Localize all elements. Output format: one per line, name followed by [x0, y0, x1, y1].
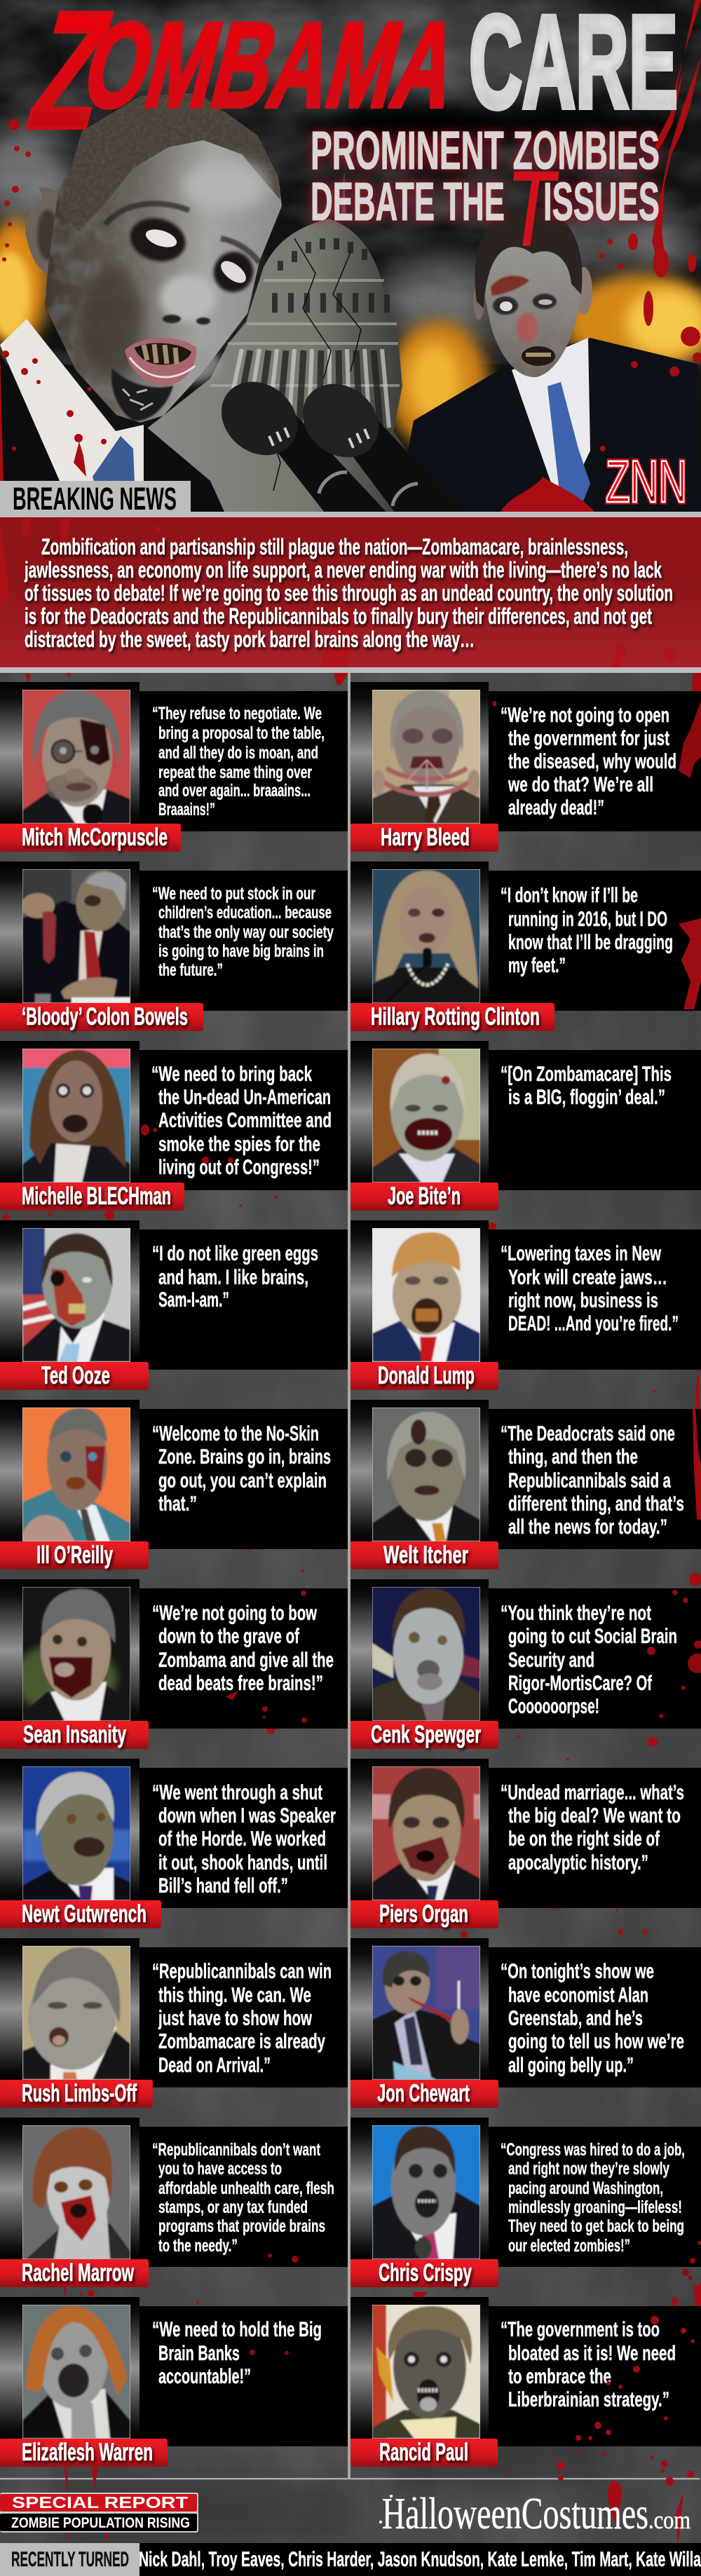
boehner zombie	[402, 206, 701, 512]
portrait	[372, 869, 480, 1003]
quote	[501, 1063, 672, 1109]
quote: “Welcome to the No-Skin	[152, 1422, 319, 1445]
quote: and ham. I like brains,	[158, 1266, 308, 1289]
name bar	[0, 1003, 203, 1031]
portrait	[22, 690, 130, 824]
breaking news tag	[0, 481, 191, 517]
name bar	[350, 1362, 498, 1390]
quote: that.”	[158, 1492, 197, 1515]
blood on quote	[141, 1124, 233, 1164]
quote: Sam-I-am.”	[158, 1288, 229, 1311]
recently turned ticker	[0, 2543, 701, 2576]
blood on quote	[682, 2241, 701, 2280]
quote: the Un-dead Un-American	[158, 1086, 331, 1109]
quote: already dead!”	[508, 796, 604, 819]
card row 10 right: Rancid Paul	[350, 2297, 701, 2467]
quote: is going to have big brains in	[158, 941, 324, 961]
name bar	[350, 1003, 554, 1031]
quote: “I do not like green eggs	[152, 1242, 318, 1265]
bottom rule	[0, 2478, 700, 2480]
background blood splatter	[2, 673, 701, 2548]
blood on quote	[226, 1590, 307, 1723]
quote: “We need to hold the Big	[152, 2318, 322, 2341]
quote: the future.”	[158, 960, 223, 980]
name bar: Rachel Marrow	[22, 2259, 134, 2287]
name bar: Michelle BLECHman	[22, 1183, 171, 1210]
name bar: Ill O’Reilly	[36, 1541, 113, 1569]
name bar: Newt Gutwrench	[22, 1900, 147, 1928]
page background	[0, 673, 701, 2576]
hair	[58, 93, 280, 231]
quote: affordable unhealth care, flesh	[158, 2179, 334, 2198]
name bar: Rancid Paul	[379, 2439, 468, 2466]
quote: “We went through a shut	[152, 1781, 322, 1804]
quote	[501, 704, 676, 819]
obama zombie	[0, 93, 282, 512]
quote: you to have access to	[158, 2159, 282, 2179]
card row 6 left: Sean Insanity	[0, 1579, 348, 1749]
card row 3 right: Joe Bite'n	[350, 1041, 701, 1211]
portrait	[372, 690, 480, 824]
card row 2 right: Hillary Rotting Clinton	[350, 861, 701, 1031]
name bar	[0, 1721, 149, 1749]
blood on quote	[268, 2254, 299, 2263]
card row 5 right: Welt Itcher	[350, 1400, 701, 1569]
quote	[501, 2318, 676, 2411]
quote	[152, 1602, 334, 1695]
special report tag	[0, 2493, 198, 2533]
name bar	[0, 2439, 168, 2467]
portrait	[372, 1766, 480, 1900]
name bar: Hillary Rotting Clinton	[371, 1003, 540, 1030]
quote: “We need to bring back	[151, 1063, 312, 1086]
quote: Braaains!”	[158, 800, 215, 819]
quote: dead beats free brains!”	[158, 1672, 323, 1695]
name bar: Jon Chewart	[377, 2080, 470, 2107]
quote: this thing. We can. We	[158, 1984, 311, 2007]
blood splatter	[0, 0, 701, 512]
blood on quote	[493, 701, 701, 778]
fire	[0, 219, 701, 450]
card row 7 right: Piers Organ	[350, 1759, 701, 1928]
portrait	[22, 1946, 130, 2080]
name bar	[0, 2080, 153, 2108]
intro blood stains	[0, 519, 675, 667]
quote: all going belly up.”	[508, 2054, 634, 2077]
quote	[501, 1602, 677, 1718]
quote	[152, 2318, 322, 2388]
quote: down to the grave of	[158, 1625, 300, 1648]
intro panel	[0, 512, 701, 673]
portrait	[372, 1587, 480, 1721]
card row 4 right: Donald Lump	[350, 1220, 701, 1390]
quote: down when I was Speaker	[158, 1804, 336, 1827]
quote: stamps, or any tax funded	[158, 2197, 308, 2217]
quote: Zombama and give all the	[158, 1649, 334, 1672]
quote: “We need to put stock in our	[152, 884, 315, 904]
smoke	[0, 0, 701, 364]
card row 2 left: Colon Bowels	[0, 861, 348, 1031]
suit and collar	[0, 354, 210, 512]
quote: Security and	[508, 1649, 594, 1672]
quote: accountable!”	[158, 2365, 251, 2388]
quote	[152, 1781, 336, 1897]
nose	[160, 274, 216, 322]
portrait	[22, 1587, 130, 1721]
title	[15, 0, 678, 163]
quote: our elected zombies!”	[508, 2236, 630, 2256]
quote	[501, 1781, 684, 1874]
card row 1 right: Harry Bleed	[350, 682, 701, 852]
quote: Zone. Brains go in, brains	[158, 1445, 331, 1468]
quote: Activities Committee and	[158, 1109, 332, 1132]
special report tag: ZOMBIE POPULATION RISING	[11, 2515, 190, 2531]
quote: programs that provide brains	[158, 2216, 325, 2236]
portrait	[22, 1049, 130, 1183]
quote: Coooooorpse!	[508, 1695, 599, 1718]
name bar	[350, 2259, 498, 2287]
quote: “Republicannibals don’t want	[152, 2140, 320, 2160]
quote: Bill’s hand fell off.”	[158, 1874, 288, 1897]
name bar: Joe Bite’n	[388, 1183, 461, 1210]
card row 10 left: Elizaflesh Warren	[0, 2297, 348, 2467]
card row 5 left: Ill O'Reilly	[0, 1400, 348, 1569]
name bar: Cenk Spewger	[371, 1721, 481, 1748]
quote: of the Horde. We worked	[158, 1827, 326, 1851]
quote: and over again... braaains...	[158, 781, 311, 800]
intro text: distracted by the sweet, tasty pork barrel brains along the way…	[25, 627, 475, 652]
quote: to embrace the	[508, 2365, 611, 2388]
microphones	[207, 367, 470, 519]
card row 8 left: Rush Limbs-Off	[0, 1938, 348, 2108]
quote: and all they do is moan, and	[158, 743, 318, 763]
eyes	[125, 212, 190, 267]
quote: living out of Congress!”	[158, 1156, 320, 1179]
portrait	[369, 2122, 484, 2263]
quote	[501, 1422, 684, 1539]
name bar: Elizaflesh Warren	[22, 2439, 153, 2466]
name bar: Donald Lump	[378, 1362, 475, 1389]
halloweencostumes logo: .com	[648, 2506, 690, 2534]
portrait	[372, 1049, 480, 1183]
portrait	[22, 1228, 130, 1362]
blood on quote	[250, 2350, 289, 2355]
card row 6 right: Cenk Spewger	[350, 1579, 701, 1749]
name bar	[0, 824, 181, 852]
quote	[152, 2140, 334, 2256]
quote	[152, 704, 325, 819]
name bar: ‘Bloody’ Colon Bowels	[22, 1003, 188, 1030]
name bar: Rush Limbs-Off	[22, 2080, 137, 2107]
name bar	[350, 2080, 498, 2108]
portrait	[22, 1408, 130, 1541]
special report tag: SPECIAL REPORT	[12, 2493, 188, 2512]
quote	[152, 1422, 331, 1515]
quote	[501, 1960, 684, 2077]
name bar	[350, 2439, 498, 2467]
subtitle: DEBATE THE	[311, 172, 505, 232]
breaking news tag: BREAKING NEWS	[13, 481, 177, 517]
portrait	[22, 2125, 130, 2259]
card row 9 left: Rachel Marrow	[0, 2118, 348, 2287]
quote	[151, 1063, 332, 1179]
portrait	[369, 2301, 484, 2442]
title word: Zombama: OMBAMA	[72, 0, 472, 132]
portrait	[22, 1766, 130, 1900]
quote	[152, 1242, 318, 1311]
quote	[501, 2140, 685, 2256]
mouth	[125, 338, 196, 386]
card row 3 left: Michelle BLECHman	[0, 1041, 348, 1211]
name bar: Piers Organ	[379, 1900, 468, 1928]
blood on quote	[647, 1590, 701, 1718]
name bar	[0, 1183, 184, 1211]
quote: my feet.”	[508, 954, 566, 977]
quote: “Republicannibals can win	[152, 1960, 332, 1983]
red T: T	[499, 150, 564, 268]
portrait	[19, 2301, 134, 2442]
ear	[25, 187, 76, 273]
name bar	[350, 1900, 498, 1928]
quote: Zombamacare is already	[158, 2030, 325, 2053]
rotted chin	[111, 368, 173, 421]
quote: Brain Banks	[158, 2342, 240, 2365]
quote: bring a proposal to the table,	[158, 723, 325, 743]
center divider	[348, 673, 350, 2479]
name bar	[0, 1362, 149, 1390]
card row 8 right: Jon Chewart	[350, 1938, 701, 2108]
portrait	[22, 869, 130, 1003]
name bar	[0, 2259, 149, 2287]
quote: smoke the spies for the	[158, 1133, 320, 1156]
quote: it out, shook hands, until	[158, 1851, 327, 1874]
name bar: Mitch McCorpuscle	[22, 824, 168, 851]
hero illustration	[0, 0, 701, 519]
subtitle	[311, 121, 660, 232]
intro text	[24, 534, 673, 652]
quote: thing, and then the	[508, 1445, 638, 1468]
name bar: Sean Insanity	[23, 1721, 126, 1748]
quote	[152, 1960, 332, 2077]
card row 7 left: Newt Gutwrench	[0, 1759, 348, 1928]
capitol	[147, 170, 449, 512]
quote: Dead on Arrival.”	[158, 2054, 271, 2077]
name bar	[0, 1900, 161, 1928]
portrait	[372, 1946, 480, 2080]
quote: that’s the only way our society	[158, 922, 334, 942]
blood on quote	[576, 2316, 695, 2441]
quote: “We’re not going to bow	[152, 1602, 317, 1625]
blood on quote	[679, 918, 701, 1009]
quote: children’s education... because	[158, 903, 332, 922]
quote: “They refuse to negotiate. We	[152, 704, 322, 723]
quote: go out, you can’t explain	[158, 1469, 327, 1492]
recently turned ticker: RECENTLY TURNED	[11, 2548, 129, 2571]
head	[45, 93, 282, 423]
quote	[501, 884, 673, 977]
name bar: Ted Ooze	[41, 1362, 110, 1389]
quote	[501, 1242, 679, 1335]
quote: just have to show how	[158, 2007, 312, 2030]
name bar: Harry Bleed	[381, 824, 470, 851]
portrait	[372, 1408, 480, 1541]
name bar: Chris Crispy	[379, 2259, 472, 2287]
card row 4 left: Ted Ooze	[0, 1220, 348, 1390]
blood on quote	[693, 1408, 701, 1520]
quote: to the needy.”	[158, 2236, 238, 2256]
quote	[152, 884, 334, 980]
card row 1 left: Mitch McCorpuscle	[0, 682, 348, 852]
quote: repeat the same thing over	[158, 763, 312, 782]
portrait	[372, 1228, 480, 1362]
card row 9 right: Chris Crispy	[350, 2118, 701, 2287]
name bar	[350, 1721, 498, 1749]
name bar	[350, 824, 498, 852]
name bar: Welt Itcher	[383, 1541, 468, 1569]
